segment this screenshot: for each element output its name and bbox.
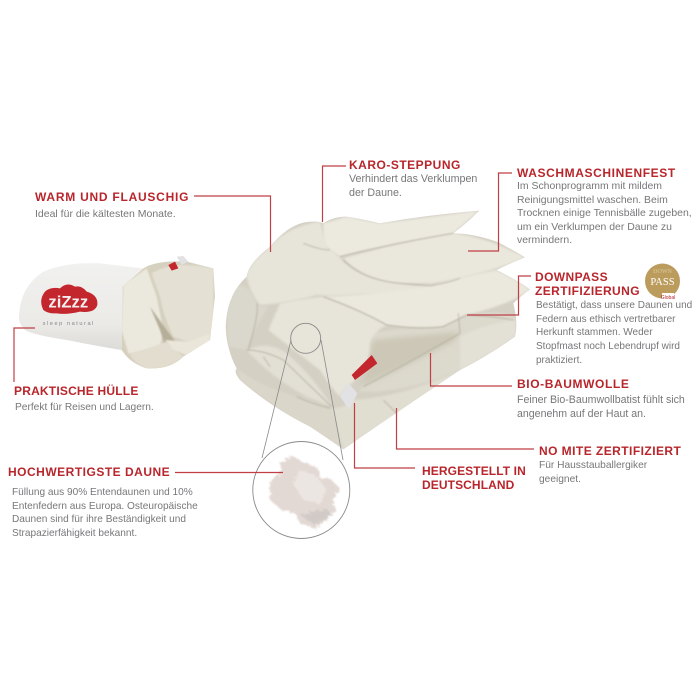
photo: folded duvet — [226, 211, 530, 449]
zoom circle — [291, 323, 321, 353]
text: Daunen sind für ihre Beständigkeit und — [12, 514, 186, 525]
red tag on roll — [168, 262, 178, 271]
callout: warm und flauschig — [35, 190, 189, 220]
text: Herkunft stammen. Weder — [536, 327, 653, 338]
text: Im Schonprogramm mit mildem — [517, 181, 662, 192]
text: Feiner Bio-Baumwollbatist fühlt sich — [517, 394, 685, 406]
text — [539, 460, 647, 484]
heading — [535, 270, 640, 298]
text: praktiziert. — [536, 355, 582, 366]
text — [517, 181, 692, 246]
heading: KARO-STEPPUNG — [349, 158, 461, 172]
logo wordmark: ziZzz — [48, 292, 88, 311]
white tag on roll — [177, 256, 188, 265]
text: Bestätigt, dass unsere Daunen und — [536, 300, 692, 311]
text: Ideal für die kältesten Monate. — [35, 208, 176, 220]
text: Für Hausstauballergiker — [539, 460, 647, 471]
text: um ein Verklumpen der Daune zu — [517, 222, 672, 232]
sewn-in tag — [352, 355, 377, 380]
text: Füllung aus 90% Entendaunen und 10% — [12, 487, 193, 498]
downpass seal: DOWN — [653, 269, 672, 275]
fold seams — [247, 233, 513, 413]
downpass seal: PASS — [650, 277, 675, 288]
text: Entenfedern aus Europa. Osteuropäische — [12, 500, 198, 512]
text: Strapazierfähigkeit bekannt. — [12, 528, 137, 538]
care label — [340, 383, 357, 410]
callout: karo-steppung — [349, 158, 477, 198]
down detail circle with feather — [253, 340, 350, 538]
text — [349, 173, 477, 198]
heading: HOCHWERTIGSTE DAUNE — [8, 465, 170, 479]
text: vermindern. — [517, 235, 572, 246]
illustration: duvets, photo details and leader lines — [13, 165, 680, 539]
heading: PRAKTISCHE HÜLLE — [14, 384, 139, 398]
text: Perfekt für Reisen und Lagern. — [15, 402, 154, 413]
text — [517, 394, 685, 420]
text: angenehm auf der Haut an. — [517, 408, 646, 420]
callout: bio-baumwolle — [517, 377, 685, 420]
text: Stopfmast noch Lebendrupf wird — [536, 341, 680, 352]
text: geeignet. — [539, 474, 581, 484]
text: Verhindert das Verklumpen — [349, 173, 477, 185]
heading: hergestellt in deutschland — [422, 464, 526, 492]
text: der Daune. — [349, 186, 402, 198]
downpass seal: Global — [661, 295, 675, 301]
callout: waschmaschinenfest — [517, 166, 692, 246]
text — [12, 487, 198, 538]
callout: praktische hülle — [14, 384, 154, 413]
logo tagline: sleep natural — [43, 321, 95, 327]
downpass seal — [645, 264, 680, 301]
heading: ZERTIFIZIERUNG — [535, 284, 640, 298]
heading: WASCHMASCHINENFEST — [517, 166, 676, 180]
heading: hergestellt in deutschland: DEUTSCHLAND — [422, 478, 514, 492]
callout: downpass zertifizierung — [535, 270, 692, 366]
text: Reinigungsmittel waschen. Beim — [517, 194, 668, 206]
callout: hochwertigste daune — [8, 465, 198, 538]
heading: WARM UND FLAUSCHIG — [35, 190, 189, 204]
leader lines — [14, 166, 534, 472]
text — [536, 300, 692, 366]
photo: rolled duvet in cover — [19, 256, 215, 369]
text: Trocknen einige Tennisbälle zugeben, — [517, 208, 692, 219]
text: Federn aus ethisch vertretbarer — [536, 314, 676, 325]
heading: hergestellt in deutschland: HERGESTELLT IN — [422, 464, 526, 478]
heading: DOWNPASS — [535, 270, 608, 284]
logo: red cloud — [41, 285, 97, 314]
heading: BIO-BAUMWOLLE — [517, 377, 629, 391]
heading: NO MITE ZERTIFIZIERT — [539, 444, 681, 458]
callout: no mite zertifiziert — [539, 444, 681, 484]
